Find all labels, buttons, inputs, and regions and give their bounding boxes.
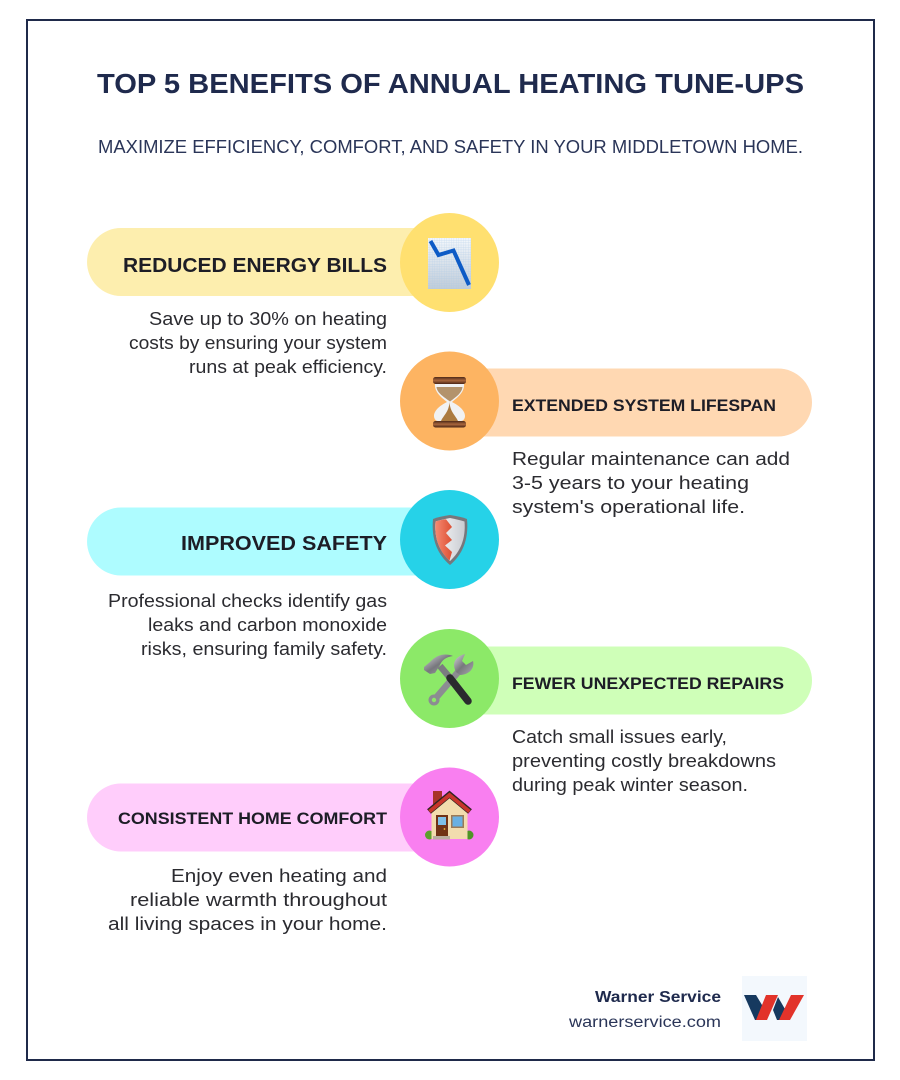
description bbox=[108, 590, 387, 659]
description: leaks and carbon monoxide bbox=[148, 614, 387, 635]
subtitle: MAXIMIZE EFFICIENCY, COMFORT, AND SAFETY IN YOUR MIDDLETOWN HOME. bbox=[98, 137, 803, 157]
description: 3-5 years to your heating bbox=[512, 472, 749, 493]
panel: fewer unexpected repairs bbox=[400, 629, 812, 795]
description: Catch small issues early, bbox=[512, 726, 727, 747]
brand name: Warner Service bbox=[595, 989, 721, 1006]
heading pill bbox=[449, 646, 812, 714]
title: TOP 5 BENEFITS OF ANNUAL HEATING TUNE-UPS bbox=[97, 68, 804, 99]
icon circle bbox=[400, 490, 499, 589]
description: costs by ensuring your system bbox=[129, 332, 387, 353]
description: runs at peak efficiency. bbox=[189, 356, 387, 377]
description bbox=[512, 448, 790, 517]
icon: hourglass bbox=[433, 377, 466, 428]
heading: FEWER UNEXPECTED REPAIRS bbox=[512, 674, 784, 693]
description bbox=[129, 308, 387, 377]
heading pill bbox=[87, 508, 449, 576]
description: Enjoy even heating and bbox=[171, 865, 387, 886]
icon circle bbox=[400, 629, 499, 728]
description: risks, ensuring family safety. bbox=[141, 638, 387, 659]
description: all living spaces in your home. bbox=[108, 913, 387, 934]
icon circle bbox=[400, 768, 499, 866]
description bbox=[512, 726, 776, 795]
description: reliable warmth throughout bbox=[130, 889, 387, 910]
heading pill bbox=[87, 784, 449, 852]
heading: CONSISTENT HOME COMFORT bbox=[118, 809, 388, 828]
heading: REDUCED ENERGY BILLS bbox=[123, 255, 387, 277]
description: preventing costly breakdowns bbox=[512, 750, 776, 771]
description: Save up to 30% on heating bbox=[149, 308, 387, 329]
description: Professional checks identify gas bbox=[108, 590, 387, 611]
heading pill bbox=[87, 228, 449, 296]
website: warnerservice.com bbox=[568, 1014, 721, 1031]
footer: brand bbox=[568, 976, 807, 1041]
icon: shield bbox=[433, 515, 467, 565]
description: system's operational life. bbox=[512, 496, 745, 517]
heading pill bbox=[449, 368, 812, 436]
logo bbox=[742, 976, 807, 1041]
icon circle bbox=[400, 352, 499, 450]
description: Regular maintenance can add bbox=[512, 448, 790, 469]
icon circle bbox=[400, 213, 499, 312]
icon: house bbox=[425, 791, 474, 840]
heading: IMPROVED SAFETY bbox=[181, 533, 388, 555]
description bbox=[108, 865, 387, 934]
panel: improved safety bbox=[87, 490, 499, 659]
icon: hammer and wrench bbox=[424, 654, 473, 706]
panel: reduced energy bills bbox=[87, 213, 499, 377]
icon: falling chart bbox=[428, 238, 471, 289]
panel: extended system lifespan bbox=[400, 352, 812, 517]
description: during peak winter season. bbox=[512, 774, 748, 795]
heading: EXTENDED SYSTEM LIFESPAN bbox=[512, 396, 776, 415]
panel: consistent home comfort bbox=[87, 768, 499, 934]
